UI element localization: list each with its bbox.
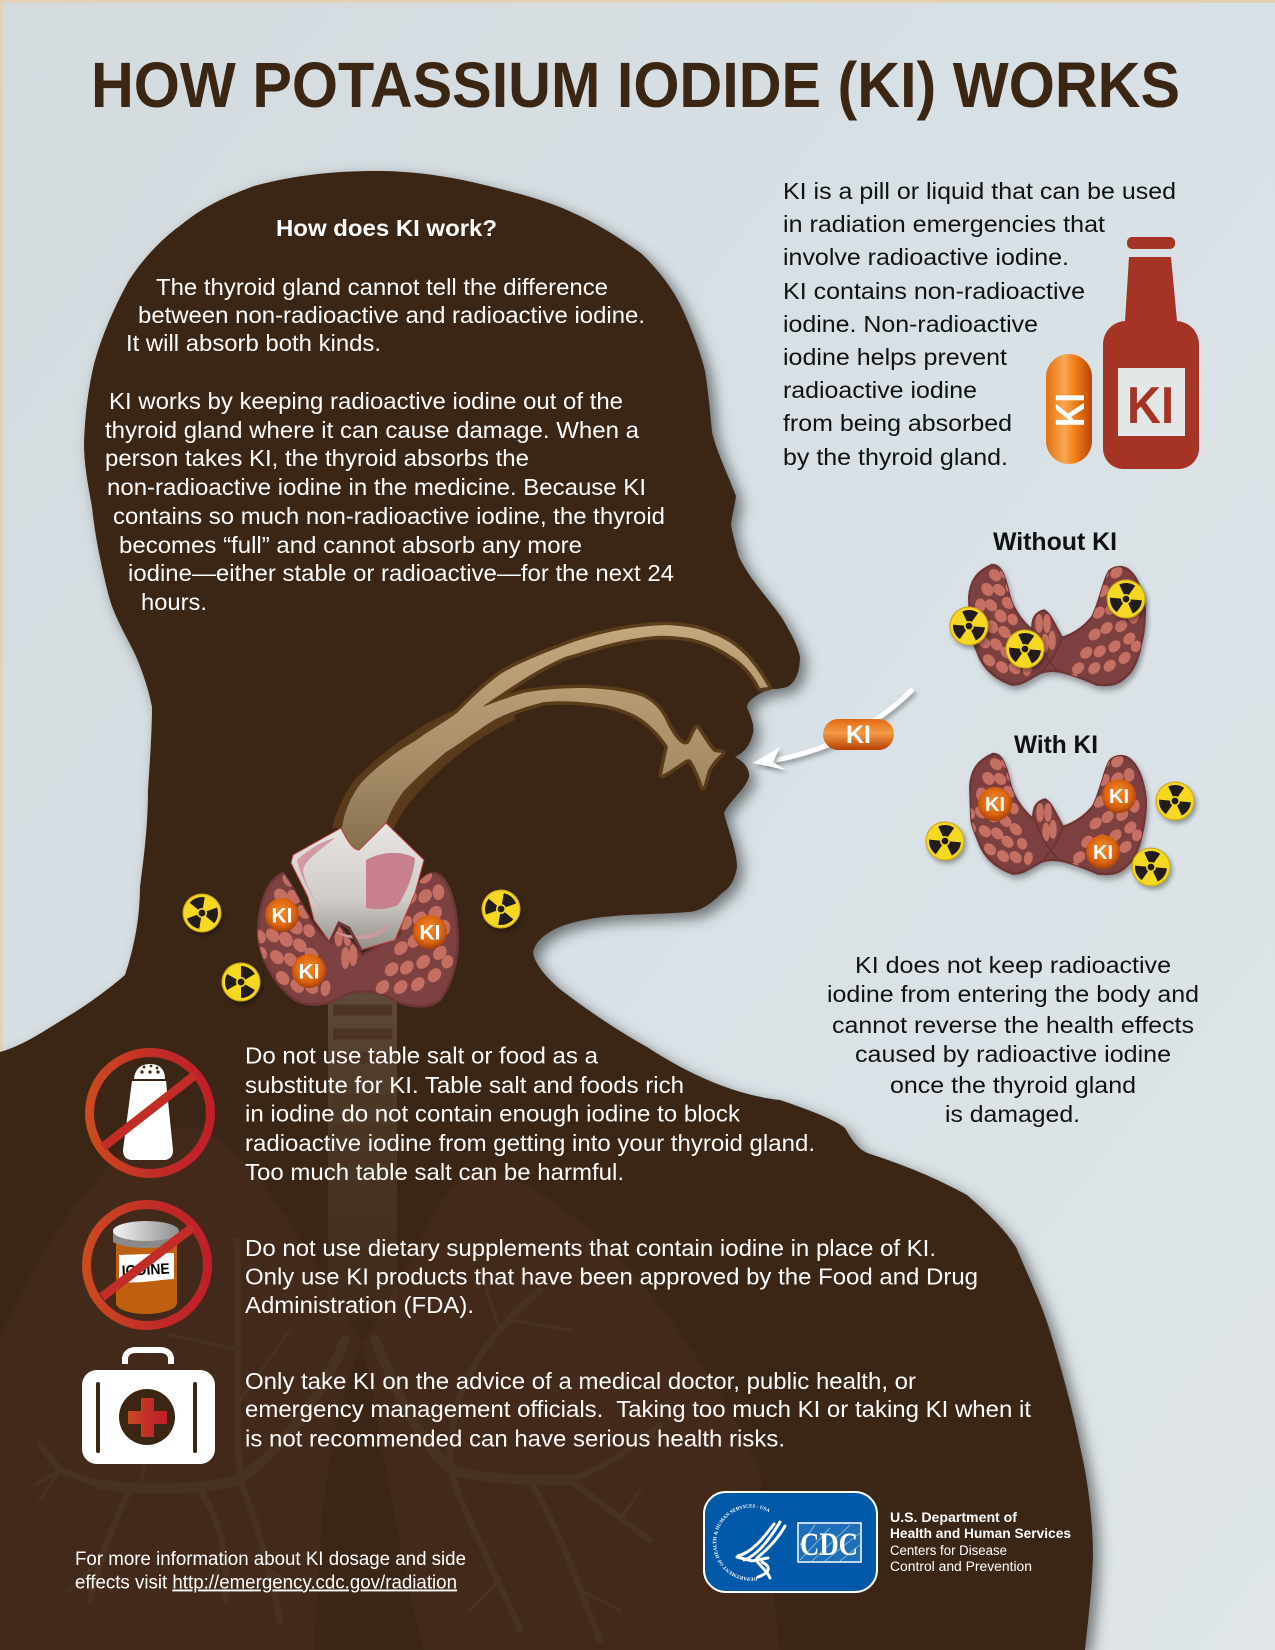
icon: horizontal KI pill — [823, 719, 894, 750]
text block: KI limitations: cannot reverse the health effects — [832, 1012, 1194, 1038]
trachea — [328, 992, 397, 1252]
icon: horizontal KI pill: KI — [846, 721, 871, 749]
KI orbs: KI — [420, 922, 440, 944]
text block: more information link — [75, 1549, 466, 1594]
text block: KI limitations — [827, 952, 1199, 1127]
heading: how does KI work: How does KI work? — [276, 215, 497, 241]
agency names: Health and Human Services — [890, 1526, 1071, 1541]
text block: more information link: For more information about KI dosage and side — [75, 1549, 466, 1570]
text block: what KI is: involve radioactive iodine. — [783, 244, 1069, 270]
text block: what KI is — [783, 178, 1176, 470]
text block: medical advice warning: Only take KI on the advice of a medical doctor, public health, or — [245, 1368, 916, 1394]
text block: how KI works: KI works by keeping radioactive iodine out of the — [109, 388, 623, 414]
text block: what KI is: by the thyroid gland. — [783, 444, 1008, 470]
text block: medical advice warning: is not recommended can have serious health risks. — [245, 1426, 785, 1452]
KI orbs: KI — [272, 904, 292, 928]
text block: table salt warning: substitute for KI. Table salt and foods rich — [245, 1072, 684, 1098]
text block: table salt warning: Do not use table salt or food as a — [245, 1042, 598, 1068]
text block: how KI works: non-radioactive iodine in the medicine. Because KI — [107, 474, 646, 500]
agency names: U.S. Department of — [890, 1510, 1018, 1525]
icon: KI bottle — [1103, 237, 1199, 469]
diagram: thyroid with KI: KI — [1109, 786, 1129, 808]
text block: table salt warning: Too much table salt can be harmful. — [245, 1159, 624, 1185]
icon: KI pill: KI — [1047, 393, 1093, 427]
text block: what KI is: KI is a pill or liquid that can be used — [783, 178, 1176, 204]
airway — [332, 625, 768, 850]
text block: how KI works: becomes “full” and cannot absorb any more — [119, 532, 582, 558]
text block: what KI is: iodine. Non-radioactive — [783, 311, 1038, 337]
KI orbs: KI — [298, 960, 320, 984]
CDC mark: CDC — [800, 1527, 858, 1563]
KI orbs — [265, 898, 447, 988]
text block: how KI works: between non-radioactive and radioactive iodine. — [138, 302, 645, 328]
text block: what KI is: KI contains non-radioactive — [783, 278, 1085, 304]
text block: how KI works: iodine—either stable or radioactive—for the next 24 — [128, 560, 674, 586]
bronchial tree — [35, 1240, 680, 1640]
text block: what KI is: from being absorbed — [783, 410, 1012, 436]
diagram: thyroid without KI — [948, 559, 1152, 690]
large thyroid with KI — [178, 823, 528, 1012]
text block: KI limitations: is damaged. — [945, 1101, 1080, 1127]
text block: how KI works: contains so much non-radioactive iodine, the thyroid — [113, 503, 665, 529]
HHS seal ring text: DEPARTMENT OF HEALTH & HUMAN SERVICES · USA — [712, 1504, 770, 1581]
text block: supplements warning: Only use KI products that have been approved by the Food and Drug — [245, 1264, 978, 1290]
silhouette: head and torso — [0, 171, 1093, 1650]
text block: medical advice warning: emergency management officials. Taking too much KI or taking KI when it — [245, 1396, 1032, 1422]
diagram: thyroid with KI — [924, 748, 1196, 888]
text block: more information link: effects visit http://emergency.cdc.gov/radiation — [75, 1572, 457, 1594]
agency names — [890, 1510, 1071, 1574]
logo: HHS and CDC — [703, 1491, 1071, 1593]
text block: KI limitations: once the thyroid gland — [890, 1072, 1136, 1098]
lungs — [33, 992, 682, 1644]
icon: no iodine supplement: IODINE — [121, 1261, 170, 1280]
heading: without KI: Without KI — [993, 528, 1117, 556]
agency names: Control and Prevention — [890, 1559, 1032, 1574]
diagram: thyroid with KI: KI — [1093, 842, 1113, 864]
text block: what KI is: radioactive iodine — [783, 377, 977, 403]
text block: table salt warning — [245, 1042, 815, 1185]
text block: how KI works: It will absorb both kinds. — [126, 330, 381, 356]
diagram: thyroid with KI: KI — [985, 794, 1005, 816]
text block: supplements warning: Administration (FDA). — [245, 1292, 474, 1318]
text block: how KI works — [105, 274, 674, 615]
agency names: Centers for Disease — [890, 1543, 1007, 1558]
icon: KI pill — [1046, 354, 1093, 464]
text block: supplements warning: Do not use dietary supplements that contain iodine in place of KI. — [245, 1235, 936, 1261]
radiation symbols outside thyroid — [178, 882, 528, 1008]
text block: how KI works: person takes KI, the thyroid absorbs the — [105, 445, 529, 471]
text block: table salt warning: in iodine do not contain enough iodine to block — [245, 1100, 741, 1126]
text block: KI limitations: iodine from entering the body and — [827, 981, 1199, 1007]
text block: how KI works: thyroid gland where it can cause damage. When a — [105, 417, 639, 443]
icon: KI bottle: KI — [1127, 377, 1174, 435]
icon: no table salt — [90, 1052, 210, 1174]
text block: how KI works: hours. — [141, 589, 207, 615]
heading: with KI: With KI — [1014, 731, 1098, 759]
HHS eagle — [737, 1522, 785, 1578]
icon: medical kit — [82, 1350, 215, 1464]
text block: how KI works: The thyroid gland cannot tell the difference — [156, 274, 608, 300]
text block: table salt warning: radioactive iodine from getting into your thyroid gland. — [245, 1130, 815, 1156]
thyroid cartilage — [291, 823, 424, 950]
title: HOW POTASSIUM IODIDE (KI) WORKS — [91, 49, 1180, 121]
text block: what KI is: in radiation emergencies that — [783, 211, 1106, 237]
text block: KI limitations: caused by radioactive iodine — [855, 1041, 1171, 1067]
icon: no iodine supplement — [86, 1204, 208, 1326]
text block: medical advice warning — [245, 1368, 1032, 1452]
arrow into mouth — [753, 689, 913, 770]
text block: supplements warning — [245, 1235, 978, 1318]
text block: KI limitations: KI does not keep radioactive — [855, 952, 1171, 978]
text block: what KI is: iodine helps prevent — [783, 344, 1008, 370]
